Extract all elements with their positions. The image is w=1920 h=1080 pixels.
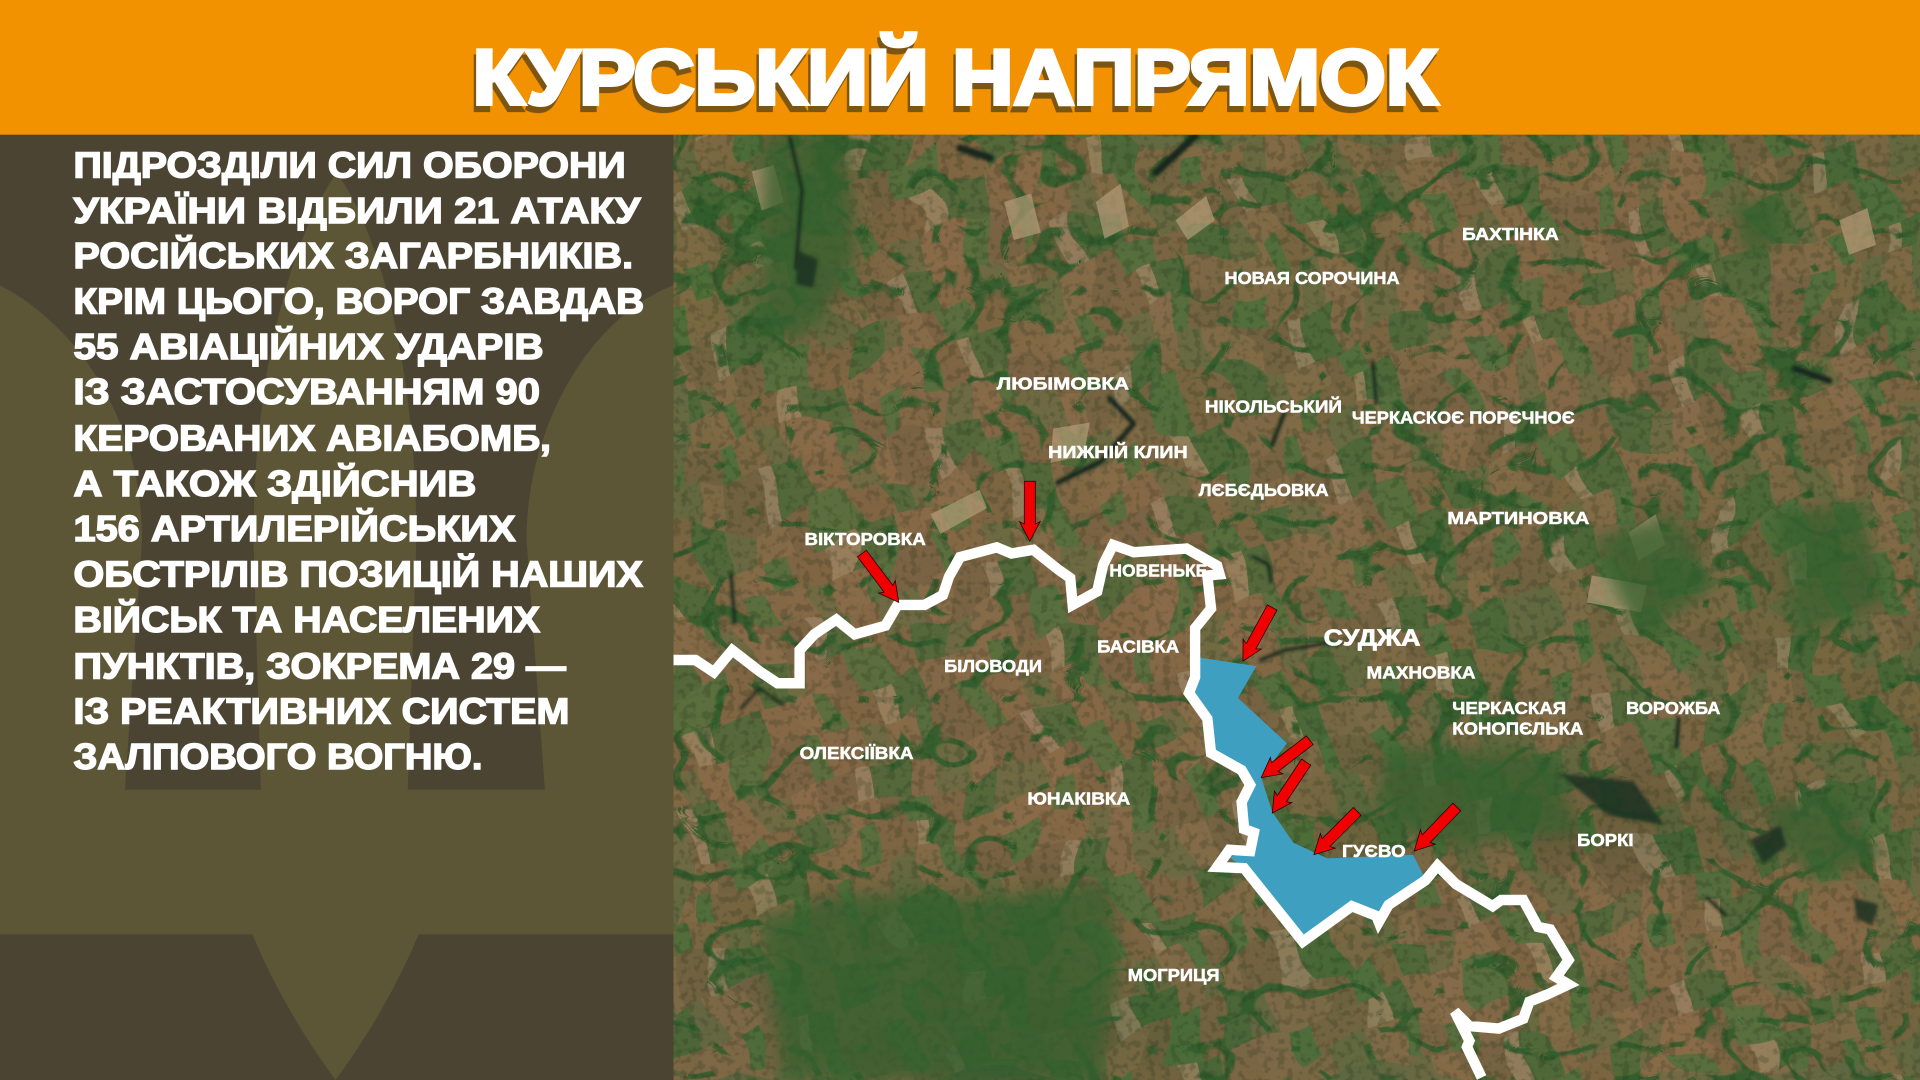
place name labels: БОРКІ — [1577, 830, 1633, 850]
place name labels: ГУЄВО — [1342, 841, 1406, 861]
place name labels: ЛЮБІМОВКА — [997, 373, 1129, 393]
place name labels: НОВЕНЬКЕ — [1109, 561, 1207, 581]
place name labels: НІКОЛЬСЬКИЙ — [1205, 396, 1342, 417]
body text: ІЗ ЗАСТОСУВАННЯМ 90 — [73, 371, 540, 412]
white border line — [673, 545, 1569, 1078]
place name labels: МАХНОВКА — [1367, 662, 1476, 682]
place name labels: МОГРИЦЯ — [1128, 965, 1220, 985]
green forest masses — [759, 135, 1886, 1080]
place name labels: БАХТІНКА — [1462, 224, 1559, 244]
arrow 7 — [1414, 802, 1462, 852]
body text: КРІМ ЦЬОГО, ВОРОГ ЗАВДАВ — [73, 280, 644, 321]
body text: ЗАЛПОВОГО ВОГНЮ. — [73, 736, 482, 777]
place name labels: СУДЖА — [1324, 624, 1421, 650]
body text: ОБСТРІЛІВ ПОЗИЦІЙ НАШИХ — [73, 553, 643, 595]
body text: 55 АВІАЦІЙНИХ УДАРІВ — [73, 325, 544, 367]
body text: ІЗ РЕАКТИВНИХ СИСТЕМ — [73, 691, 569, 732]
place name labels: ЛЄБЄДЬОВКА — [1199, 480, 1329, 500]
place name labels: МАРТИНОВКА — [1447, 508, 1590, 528]
arrow 6 — [1313, 807, 1362, 856]
light bare fields — [752, 165, 1876, 612]
place name labels: БІЛОВОДИ — [944, 656, 1042, 676]
place name labels: ЮНАКІВКА — [1027, 788, 1130, 808]
trident watermark — [0, 173, 673, 1080]
body text: РОСІЙСЬКИХ ЗАГАРБНИКІВ. — [73, 234, 633, 276]
place name labels: КОНОПЄЛЬКА — [1452, 719, 1583, 739]
place name labels: ВОРОЖБА — [1626, 698, 1721, 718]
place name labels: НИЖНІЙ КЛИН — [1048, 441, 1188, 462]
body text: А ТАКОЖ ЗДІЙСНИВ — [73, 462, 476, 504]
body text: 156 АРТИЛЕРІЙСЬКИХ — [73, 507, 516, 549]
arrow 5 — [1272, 758, 1312, 814]
dark forests — [796, 251, 1878, 926]
arrows: red attack directions — [854, 481, 1464, 862]
place name labels: ВІКТОРОВКА — [804, 529, 926, 549]
title: КУРСЬКИЙ НАПРЯМОК — [473, 33, 1438, 121]
body text: ВІЙСЬК ТА НАСЕЛЕНИХ — [73, 598, 540, 640]
body text — [73, 145, 644, 777]
fine texture — [673, 135, 1920, 1080]
green stream valleys — [673, 135, 1920, 1080]
arrow 1 — [857, 550, 900, 604]
panel: left text panel — [0, 135, 673, 1080]
body text: ПІДРОЗДІЛИ СИЛ ОБОРОНИ — [73, 145, 626, 186]
place name labels: ЧЕРКАСКОЄ ПОРЄЧНОЄ — [1352, 408, 1575, 428]
place name labels: БАСІВКА — [1097, 637, 1179, 657]
place name labels: НОВАЯ СОРОЧИНА — [1224, 268, 1400, 288]
occupied zone: blue area — [1189, 658, 1425, 942]
arrow 2 — [1019, 481, 1040, 541]
place name labels: ОЛЕКСІЇВКА — [800, 743, 914, 763]
header band — [0, 0, 1920, 135]
place name labels: ЧЕРКАСКАЯ — [1452, 698, 1566, 718]
arrow 3 — [1242, 604, 1278, 662]
body text: КЕРОВАНИХ АВІАБОМБ, — [73, 418, 551, 459]
field mosaic — [673, 135, 1920, 1080]
body text: ПУНКТІВ, ЗОКРЕМА 29 — — [73, 645, 567, 686]
rivers — [731, 136, 1829, 915]
body text: УКРАЇНИ ВІДБИЛИ 21 АТАКУ — [73, 190, 641, 231]
arrow 4 — [1260, 736, 1314, 778]
satellite map — [673, 135, 1920, 1080]
map tone base — [673, 135, 1920, 1080]
place name labels — [800, 224, 1721, 985]
